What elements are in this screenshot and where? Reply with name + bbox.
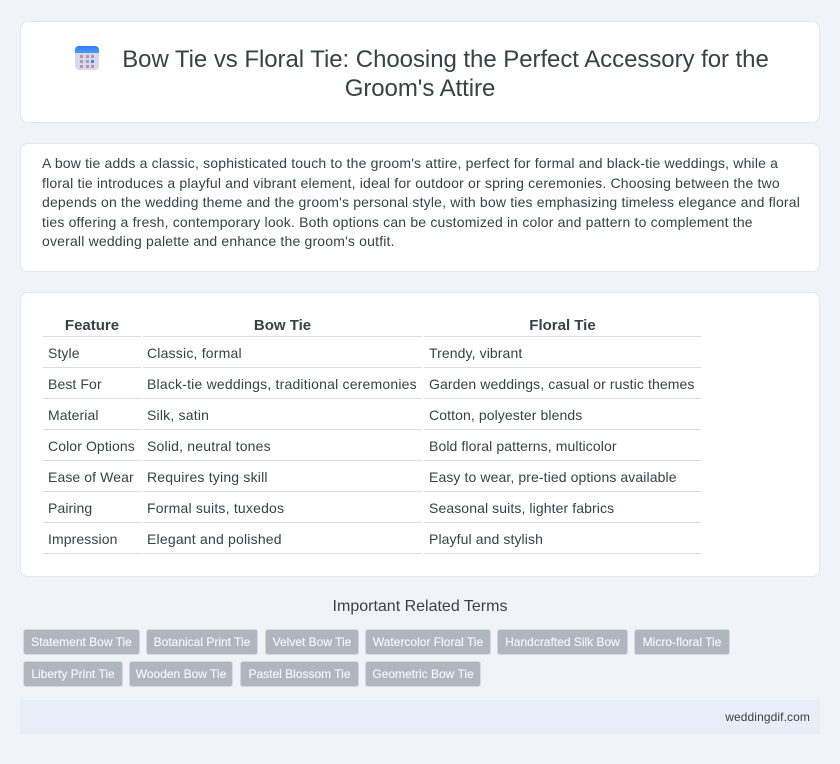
heading: related terms: Important Related Terms bbox=[333, 598, 507, 615]
row: style bbox=[48, 345, 522, 361]
row: ease of wear: Requires tying skill bbox=[147, 469, 268, 485]
table header: Floral Tie bbox=[529, 317, 596, 334]
tag: Wooden Bow Tie bbox=[136, 667, 226, 681]
row: pairing bbox=[48, 500, 614, 516]
tag bbox=[634, 629, 730, 655]
panel: title card bbox=[20, 21, 820, 123]
row: style: Classic, formal bbox=[147, 345, 242, 361]
row: style: Style bbox=[48, 345, 80, 361]
row: best for: Best For bbox=[48, 376, 102, 392]
panel: comparison table card bbox=[20, 292, 820, 577]
tag bbox=[265, 629, 359, 655]
row: impression: Elegant and polished bbox=[147, 531, 282, 547]
tag: Handcrafted Silk Bow bbox=[505, 635, 620, 649]
table header bbox=[65, 317, 596, 334]
intro paragraph: floral tie introduces a playful and vibrant element, ideal for outdoor or spring ceremonies. Choosing between the two bbox=[42, 175, 780, 191]
row: pairing: Formal suits, tuxedos bbox=[147, 500, 284, 516]
row: style: Trendy, vibrant bbox=[429, 345, 522, 361]
row: pairing: Seasonal suits, lighter fabrics bbox=[429, 500, 614, 516]
tag: Pastel Blossom Tie bbox=[248, 667, 351, 681]
row: color options: Bold floral patterns, multicolor bbox=[429, 438, 617, 454]
tag bbox=[23, 629, 140, 655]
row: ease of wear: Easy to wear, pre-tied options available bbox=[429, 469, 677, 485]
row: impression: Playful and stylish bbox=[429, 531, 543, 547]
row: material bbox=[48, 407, 582, 423]
row: impression: Impression bbox=[48, 531, 117, 547]
tag: Micro-floral Tie bbox=[643, 635, 721, 649]
tag: Statement Bow Tie bbox=[31, 635, 132, 649]
comparison table bbox=[43, 317, 701, 554]
title: Groom's Attire bbox=[345, 75, 495, 102]
table header: Bow Tie bbox=[254, 317, 311, 334]
tag: Liberty Print Tie bbox=[31, 667, 115, 681]
tag bbox=[129, 661, 233, 687]
tag bbox=[365, 629, 491, 655]
row: best for bbox=[48, 376, 694, 392]
intro paragraph bbox=[42, 155, 800, 249]
row: color options: Solid, neutral tones bbox=[147, 438, 271, 454]
title bbox=[122, 46, 769, 102]
tag: Velvet Bow Tie bbox=[273, 635, 351, 649]
row: pairing: Pairing bbox=[48, 500, 92, 516]
tag: Geometric Bow Tie bbox=[372, 667, 474, 681]
row: best for: Black-tie weddings, traditional ceremonies bbox=[147, 376, 417, 392]
title: Bow Tie vs Floral Tie: Choosing the Perfect Accessory for the bbox=[122, 46, 769, 73]
panel: intro text card bbox=[20, 143, 820, 272]
footer bar bbox=[20, 700, 820, 734]
tag bbox=[240, 661, 359, 687]
row: ease of wear: Ease of Wear bbox=[48, 469, 134, 485]
intro paragraph: A bow tie adds a classic, sophisticated touch to the groom's attire, perfect for formal and black-tie weddings, while a bbox=[42, 155, 778, 171]
row: material: Cotton, polyester blends bbox=[429, 407, 582, 423]
related term tags bbox=[23, 629, 730, 687]
tag: Botanical Print Tie bbox=[154, 635, 250, 649]
tag: Watercolor Floral Tie bbox=[373, 635, 483, 649]
tag bbox=[146, 629, 258, 655]
intro paragraph: ties offering a fresh, contemporary look. Both options can be customized in color and pattern to complement the bbox=[42, 214, 753, 230]
row: impression bbox=[48, 531, 543, 547]
tag bbox=[365, 661, 481, 687]
tag bbox=[23, 661, 123, 687]
row: ease of wear bbox=[48, 469, 677, 485]
table header: Feature bbox=[65, 317, 119, 334]
tag bbox=[497, 629, 628, 655]
row: material: Material bbox=[48, 407, 99, 423]
footer source: weddingdif.com bbox=[725, 710, 810, 724]
row: color options bbox=[48, 438, 617, 454]
row: best for: Garden weddings, casual or rustic themes bbox=[429, 376, 694, 392]
icon: calendar bbox=[75, 46, 99, 70]
intro paragraph: depends on the wedding theme and the groom's personal style, with bow ties emphasizing timeless elegance and floral bbox=[42, 194, 800, 210]
row: material: Silk, satin bbox=[147, 407, 209, 423]
row: color options: Color Options bbox=[48, 438, 135, 454]
intro paragraph: overall wedding palette and enhance the groom's outfit. bbox=[42, 233, 395, 249]
